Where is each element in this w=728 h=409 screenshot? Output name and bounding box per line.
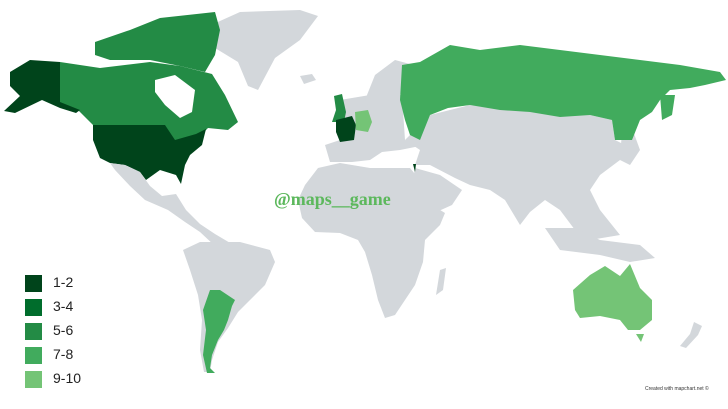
legend item 3-4: 3-4 — [53, 298, 73, 314]
new zealand — [680, 322, 702, 348]
legend item 1-2: 1-2 — [53, 274, 73, 290]
legend item 7-8: 7-8 — [53, 346, 73, 362]
legend item 3-4 — [25, 298, 73, 316]
legend item 1-2 — [25, 274, 73, 292]
credit: Created with mapchart.net © — [645, 385, 709, 392]
greenland — [200, 10, 318, 90]
argentina — [203, 290, 235, 373]
russia — [400, 45, 726, 140]
watermark: @maps__game — [274, 189, 391, 209]
australia — [573, 264, 652, 342]
mexico and central america — [110, 163, 242, 256]
hudson bay — [155, 75, 195, 118]
legend item 9-10: 9-10 — [53, 370, 81, 386]
asia — [405, 105, 625, 240]
japan and islands — [545, 128, 655, 262]
canada — [60, 12, 238, 145]
legend item 9-10 — [25, 370, 81, 388]
legend item 7-8 — [25, 346, 73, 364]
germany — [355, 110, 372, 132]
europe — [325, 60, 420, 162]
africa — [298, 163, 446, 318]
legend item 5-6 — [25, 322, 73, 340]
arabia — [413, 168, 462, 214]
uk — [332, 94, 346, 122]
legend item 5-6: 5-6 — [53, 322, 73, 338]
usa — [93, 125, 206, 184]
south america — [183, 242, 275, 372]
france — [336, 116, 356, 142]
israel — [413, 164, 416, 172]
legend — [25, 274, 81, 388]
alaska — [4, 60, 80, 113]
